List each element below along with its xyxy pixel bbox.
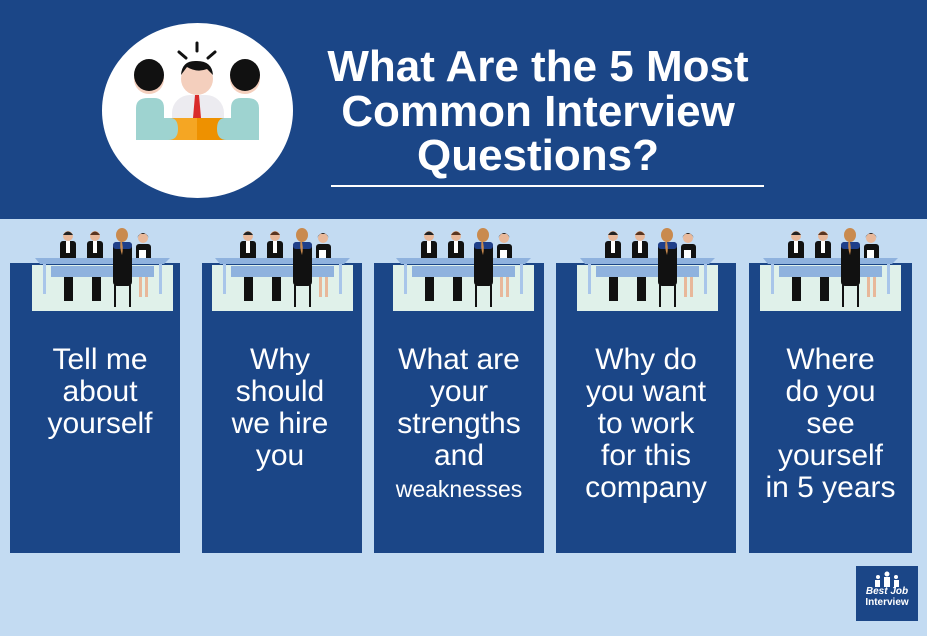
- question 4 text: to work: [598, 407, 694, 440]
- title: [327, 42, 749, 180]
- question 3 text: your: [430, 375, 488, 408]
- header band: [0, 0, 927, 219]
- logo: Best Job: [866, 586, 908, 597]
- scene 5: [760, 228, 901, 311]
- card 1: [10, 263, 180, 553]
- question 3 text: [396, 343, 522, 502]
- question 4 text: company: [585, 471, 707, 504]
- question 3 text: and: [434, 439, 484, 472]
- scene 3: [393, 228, 534, 311]
- title: What Are the 5 Most: [327, 42, 749, 91]
- card 4: [556, 263, 736, 553]
- title: Questions?: [417, 131, 659, 180]
- question 2 text: [232, 343, 328, 472]
- question 5 text: do you: [785, 375, 876, 408]
- question 3 text: What are: [398, 343, 520, 376]
- question 2 text: should: [236, 375, 324, 408]
- icon: meeting circle: [102, 23, 293, 198]
- question 2 text: you: [256, 439, 304, 472]
- question 1 text: [47, 343, 153, 440]
- question 5 text: see: [806, 407, 855, 440]
- question 4 text: [585, 343, 707, 504]
- question 4 text: for this: [601, 439, 691, 472]
- card 2: [202, 263, 362, 553]
- card 3: [374, 263, 544, 553]
- question 5 text: Where: [786, 343, 875, 376]
- scene 1: [32, 228, 173, 311]
- question 3 text: strengths: [397, 407, 521, 440]
- question 1 text: about: [62, 375, 138, 408]
- question 1 text: Tell me: [52, 343, 148, 376]
- underline: [331, 185, 764, 187]
- question 1 text: yourself: [47, 407, 153, 440]
- question 4 text: you want: [586, 375, 706, 408]
- question 2 text: we hire: [232, 407, 328, 440]
- scene 4: [577, 228, 718, 311]
- logo: Interview: [865, 597, 909, 608]
- logo: [856, 566, 918, 621]
- question 2 text: Why: [250, 343, 310, 376]
- question 5 text: in 5 years: [765, 471, 896, 504]
- question 4 text: Why do: [595, 343, 697, 376]
- question 5 text: [765, 343, 896, 504]
- scene 2: [212, 228, 353, 311]
- question 3 text: weaknesses: [396, 476, 522, 502]
- card 5: [749, 263, 912, 553]
- title: Common Interview: [341, 86, 735, 136]
- question 5 text: yourself: [778, 439, 883, 472]
